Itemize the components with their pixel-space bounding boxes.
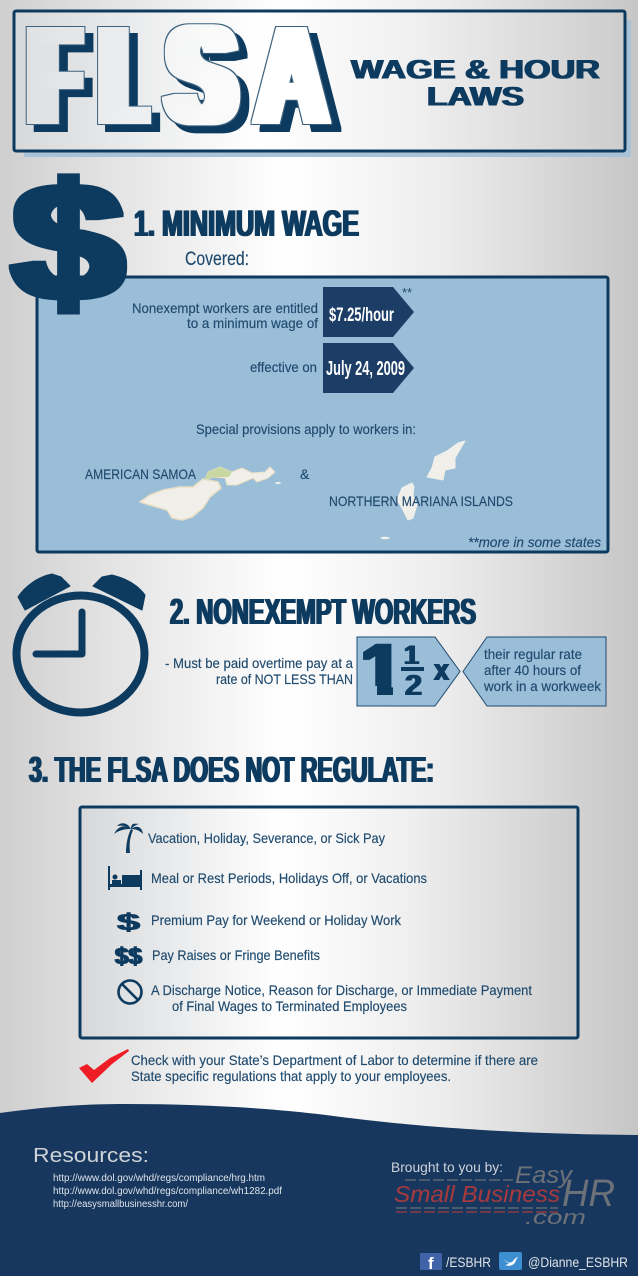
- logo: easy small business hr: Easy: [515, 1162, 574, 1189]
- logo: easy small business hr: HR: [562, 1173, 615, 1215]
- label: northern mariana islands: NORTHERN MARIANA ISLANDS: [329, 493, 513, 509]
- text: special provisions: Special provisions apply to workers in:: [196, 421, 416, 437]
- title: FLSA: S: [170, 0, 233, 153]
- map: northern mariana islands: [381, 441, 465, 539]
- text: overtime pay: rate of NOT LESS THAN: [216, 671, 353, 687]
- footer band: [0, 1104, 638, 1276]
- map: american samoa: [140, 467, 281, 520]
- icon: dollar: $: [117, 909, 141, 936]
- arrow: one and a half times: 1: [361, 628, 402, 711]
- arrow: one and a half times: 1: [404, 640, 419, 670]
- icon: alarm clock: [16, 574, 145, 712]
- text: resource links: http://www.dol.gov/whd/regs/compliance/hrg.htm: [53, 1173, 265, 1184]
- title: FLSA: F: [33, 0, 76, 153]
- icon: red check mark: [79, 1049, 129, 1083]
- text: overtime pay: [165, 655, 353, 687]
- logo: easy small business hr: .com: [525, 1207, 586, 1229]
- text: effective on: effective on: [250, 359, 317, 375]
- icon: twitter: [499, 1252, 522, 1270]
- note: more in some states: **more in some states: [468, 534, 601, 550]
- icon: double dollar: $$: [115, 943, 143, 970]
- arrow: effective date: [323, 343, 414, 393]
- callout: regular rate: [463, 637, 606, 706]
- text: nonexempt workers: [132, 300, 318, 331]
- text: overtime pay: - Must be paid overtime pay at a: [165, 655, 353, 671]
- text: pay raises: Pay Raises or Fringe Benefits: [152, 947, 320, 963]
- icon: prohibited sign: [118, 980, 142, 1004]
- text: ampersand: &: [300, 466, 310, 482]
- title: FLSA: L: [105, 0, 142, 153]
- icon: dollar sign: $: [12, 148, 124, 336]
- text: nonexempt workers: to a minimum wage of: [187, 315, 318, 331]
- text: asterisks: **: [402, 285, 412, 300]
- text: discharge notice: [151, 982, 532, 1014]
- icon: bed: [108, 866, 142, 890]
- arrow: wage amount: [323, 287, 414, 337]
- text: premium pay: Premium Pay for Weekend or Holiday Work: [151, 912, 402, 928]
- icon: facebook: [420, 1253, 442, 1273]
- text: meal or rest periods: Meal or Rest Periods, Holidays Off, or Vacations: [151, 870, 427, 886]
- heading: resources: Resources:: [33, 1145, 149, 1167]
- text: covered: Covered:: [185, 249, 249, 270]
- subtitle: wage and hour laws: [351, 54, 600, 112]
- heading: nonexempt workers: 2. NONEXEMPT WORKERS: [170, 591, 476, 632]
- panel: title banner: [14, 11, 631, 157]
- panel: not regulated list: [80, 807, 578, 1038]
- text: discharge notice: of Final Wages to Terminated Employees: [172, 998, 407, 1014]
- logo: easy small business hr: [394, 1162, 615, 1229]
- text: discharge notice: A Discharge Notice, Reason for Discharge, or Immediate Payment: [151, 982, 532, 998]
- label: american samoa: AMERICAN SAMOA: [85, 466, 197, 482]
- text: check with your state: Check with your State’s Department of Labor to determine if there are: [131, 1052, 538, 1068]
- callout: regular rate: their regular rate: [484, 646, 582, 662]
- title: FLSA: A: [256, 0, 327, 153]
- text: resource links: http://www.dol.gov/whd/regs/compliance/wh1282.pdf: [53, 1186, 282, 1197]
- subtitle: wage and hour laws: WAGE & HOUR: [351, 54, 600, 84]
- arrow: effective date: July 24, 2009: [326, 358, 405, 380]
- text: brought to you by: Brought to you by:: [391, 1159, 503, 1175]
- icon: palm tree: [114, 823, 143, 853]
- logo: easy small business hr: Small Business: [394, 1181, 561, 1207]
- title: FLSA: [33, 0, 327, 153]
- arrow: one and a half times: x: [434, 652, 450, 687]
- heading: minimum wage: 1. MINIMUM WAGE: [134, 203, 359, 244]
- text: facebook handle: /ESBHR: [446, 1254, 491, 1270]
- text: vacation: Vacation, Holiday, Severance, or Sick Pay: [148, 830, 385, 846]
- arrow: one and a half times: [356, 636, 460, 706]
- text: nonexempt workers: Nonexempt workers are entitled: [132, 300, 318, 316]
- arrow: one and a half times: 2: [405, 670, 422, 702]
- text: check with your state: [131, 1052, 538, 1084]
- subtitle: wage and hour laws: LAWS: [427, 82, 524, 112]
- callout: regular rate: work in a workweek: [483, 678, 602, 694]
- text: check with your state: State specific regulations that apply to your employees.: [131, 1068, 451, 1084]
- text: resource links: http://easysmallbusinesshr.com/: [53, 1199, 188, 1210]
- arrow: wage amount: $7.25/hour: [329, 305, 394, 326]
- icon: facebook: f: [428, 1254, 434, 1273]
- panel: minimum wage: [37, 277, 608, 552]
- callout: regular rate: after 40 hours of: [484, 662, 581, 678]
- text: resource links: [53, 1173, 282, 1210]
